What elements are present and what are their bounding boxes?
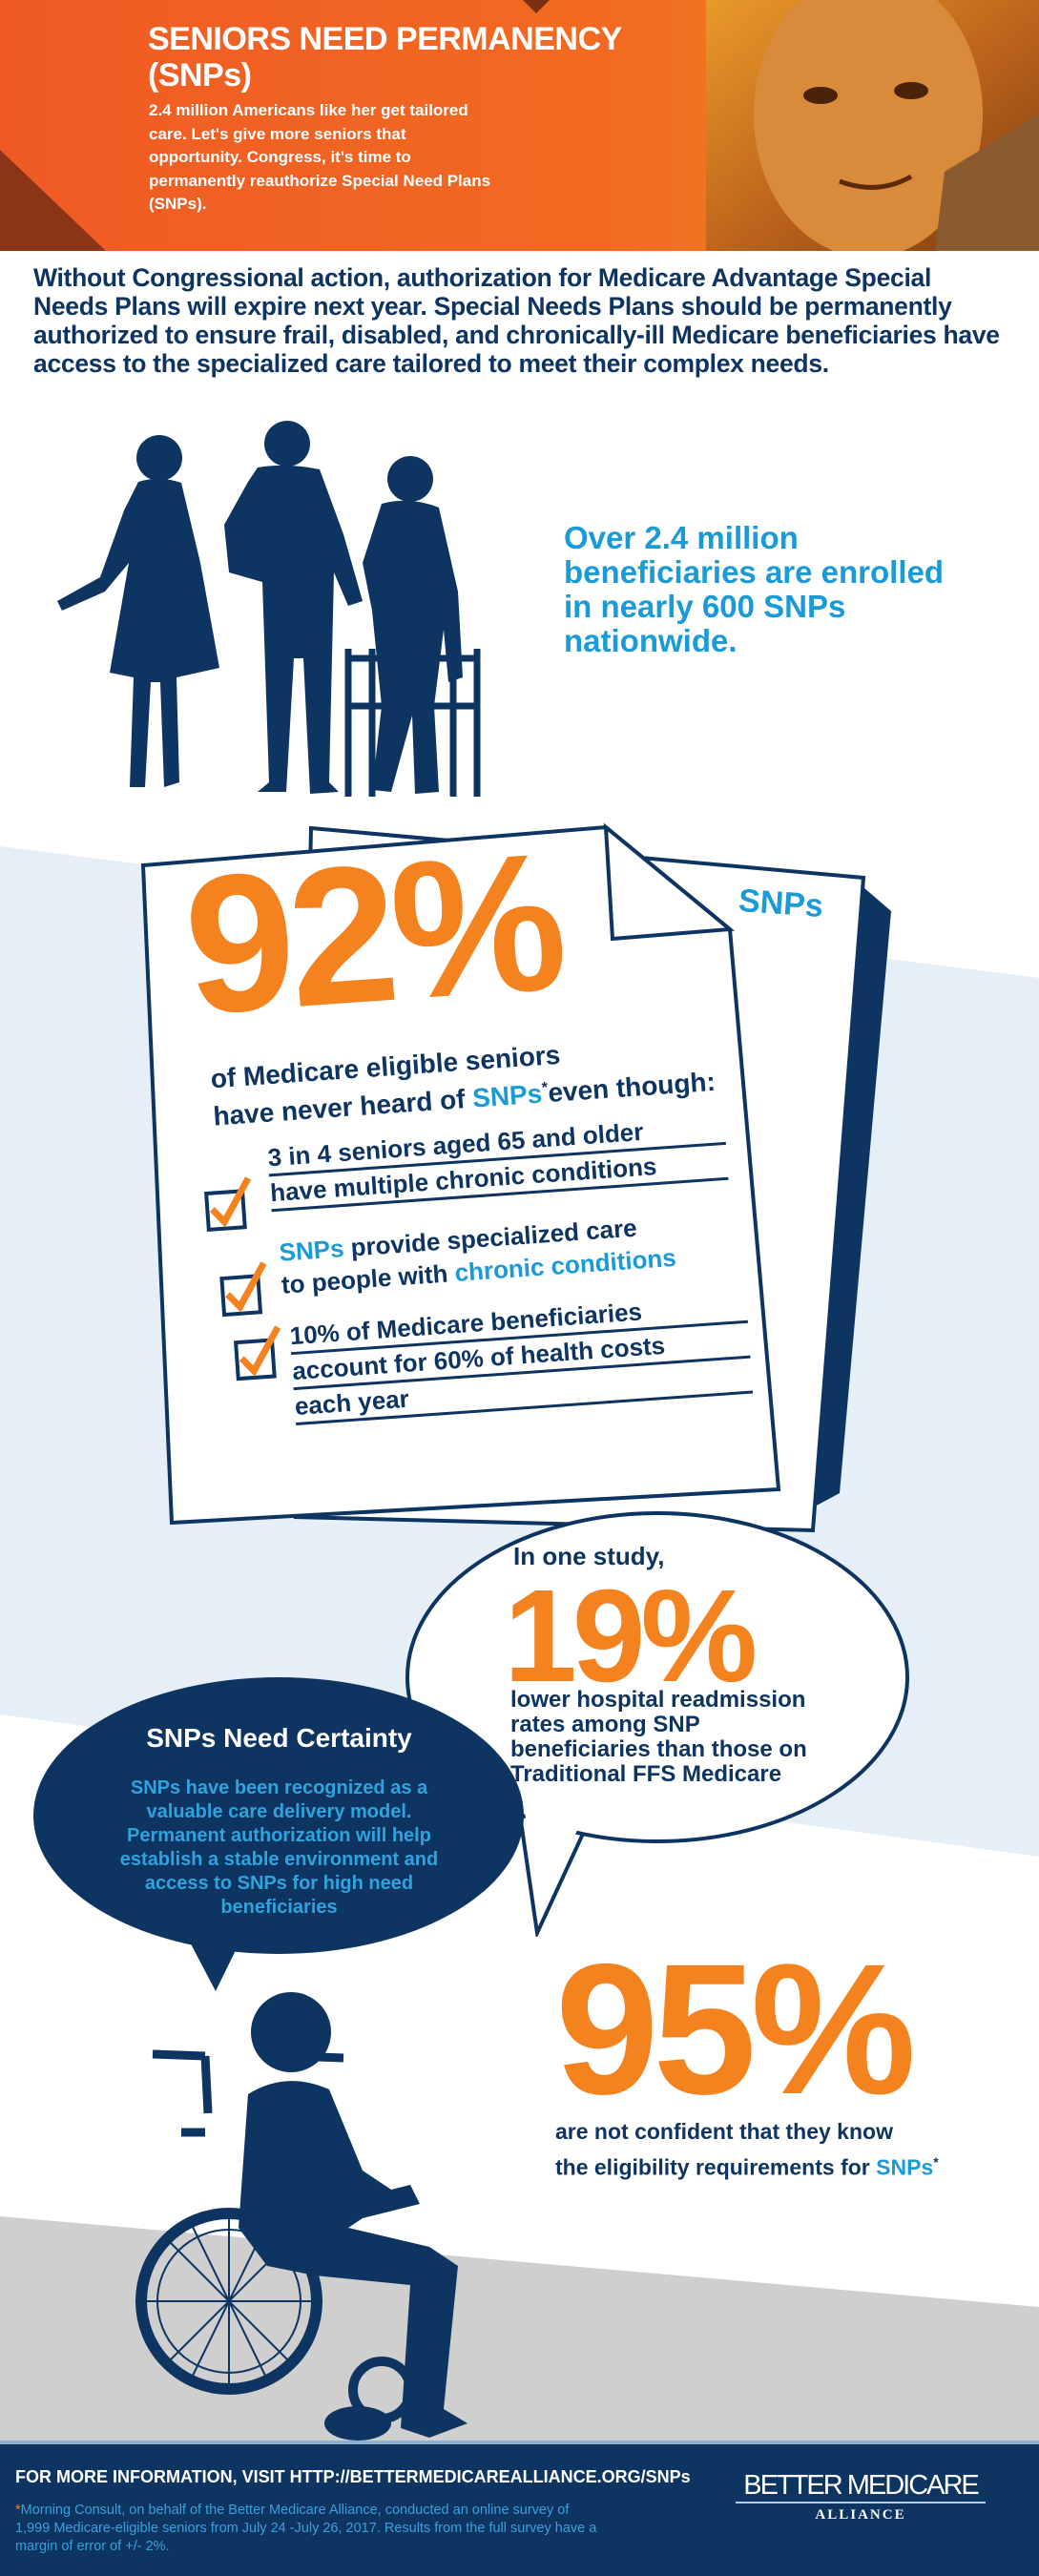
footer: footnote: *Morning Consult, on behalf of the Better Medicare Alliance, conducted an online survey of (15, 2503, 569, 2518)
callout: 19% speech bubble (405, 1511, 909, 1937)
big stat 95%: 95% (555, 1925, 910, 2133)
icon: seniors silhouette (57, 421, 481, 797)
callout: 19% speech bubble: rates among SNP (510, 1712, 700, 1737)
logo: Better Medicare Alliance: BETTER MEDICARE (743, 2470, 978, 2501)
checklist item 3: 10% of Medicare beneficiaries (289, 1297, 643, 1350)
title: (SNPs) (148, 57, 251, 93)
checklist item 1: have multiple chronic conditions (269, 1152, 657, 1207)
logo: Better Medicare Alliance (736, 2470, 986, 2523)
stat description: have never heard of SNPs*even though: (212, 1067, 717, 1132)
stat: enrollment: Over 2.4 million (564, 520, 799, 555)
panel: SNPs document (141, 822, 891, 1532)
stat: enrollment: in nearly 600 SNPs (564, 589, 845, 624)
checklist item 3: account for 60% of health costs (291, 1331, 666, 1385)
intro paragraph: Needs Plans will expire next year. Special Needs Plans should be permanently (33, 292, 952, 321)
checklist item 1: 3 in 4 seniors aged 65 and older (267, 1117, 644, 1172)
callout: 19% speech bubble: beneficiaries than those on (510, 1736, 807, 1762)
callout: SNPs Need Certainty bubble (33, 1677, 524, 1991)
callout: SNPs Need Certainty bubble: valuable care delivery model. (147, 1801, 411, 1822)
checklist item 2 (219, 1214, 677, 1317)
icon: wheelchair silhouette (135, 1992, 468, 2441)
header subtitle: care. Let's give more seniors that (149, 124, 406, 143)
callout: 19% speech bubble: 19% (504, 1563, 753, 1710)
stat description 95% (555, 2119, 939, 2180)
title (148, 21, 622, 93)
label: SNPs tab: SNPs (738, 883, 824, 924)
callout: SNPs Need Certainty bubble: Permanent authorization will help (127, 1825, 431, 1846)
stat: enrollment (564, 520, 944, 658)
title: SENIORS NEED PERMANENCY (148, 21, 622, 57)
footer: footnote: 1,999 Medicare-eligible seniors from July 24 -July 26, 2017. Results from the full survey have a (15, 2521, 596, 2536)
intro paragraph (33, 263, 1000, 378)
big stat 92%: 92% (178, 812, 567, 1056)
logo: Better Medicare Alliance: ALLIANCE (815, 2507, 906, 2523)
stat description 95%: are not confident that they know (555, 2119, 893, 2144)
stat description 95%: the eligibility requirements for SNPs* (555, 2154, 939, 2180)
callout: SNPs Need Certainty bubble: beneficiaries (220, 1897, 338, 1918)
checklist item 2: SNPs provide specialized care (279, 1214, 638, 1267)
header subtitle (149, 101, 490, 213)
footer: more info: FOR MORE INFORMATION, VISIT HTTP://BETTERMEDICAREALLIANCE.ORG/SNPs (15, 2467, 691, 2486)
checklist item 3 (234, 1297, 754, 1425)
intro paragraph: authorized to ensure frail, disabled, and chronically-ill Medicare beneficiaries have (33, 321, 1000, 349)
checklist item 2: to people with chronic conditions (281, 1243, 677, 1299)
stat: enrollment: nationwide. (564, 623, 737, 658)
stat description: of Medicare eligible seniors (210, 1040, 561, 1093)
footer: footnote (15, 2503, 597, 2554)
footer: footnote: margin of error of +/- 2%. (15, 2539, 170, 2554)
callout: 19% speech bubble: lower hospital readmission (510, 1687, 805, 1713)
callout: SNPs Need Certainty bubble: establish a stable environment and (120, 1849, 438, 1870)
callout: SNPs Need Certainty bubble: access to SNPs for high need (145, 1873, 413, 1894)
intro paragraph: Without Congressional action, authorization for Medicare Advantage Special (33, 263, 931, 292)
callout: 19% speech bubble: In one study, (513, 1542, 664, 1570)
callout: 19% speech bubble: Traditional FFS Medicare (510, 1761, 781, 1787)
header photo (706, 0, 1039, 251)
checklist item 3: each year (294, 1384, 410, 1421)
header subtitle: 2.4 million Americans like her get tailored (149, 101, 468, 119)
header subtitle: (SNPs). (149, 195, 206, 213)
document content (178, 812, 754, 1425)
header subtitle: opportunity. Congress, it's time to (149, 148, 411, 166)
header subtitle: permanently reauthorize Special Need Plans (149, 172, 490, 189)
callout: SNPs Need Certainty bubble: SNPs have been recognized as a (131, 1777, 427, 1798)
intro paragraph: access to the specialized care tailored to meet their complex needs. (33, 349, 829, 378)
callout: SNPs Need Certainty bubble: SNPs Need Certainty (146, 1723, 412, 1753)
checklist item 1 (204, 1117, 729, 1232)
stat: enrollment: beneficiaries are enrolled (564, 554, 944, 590)
